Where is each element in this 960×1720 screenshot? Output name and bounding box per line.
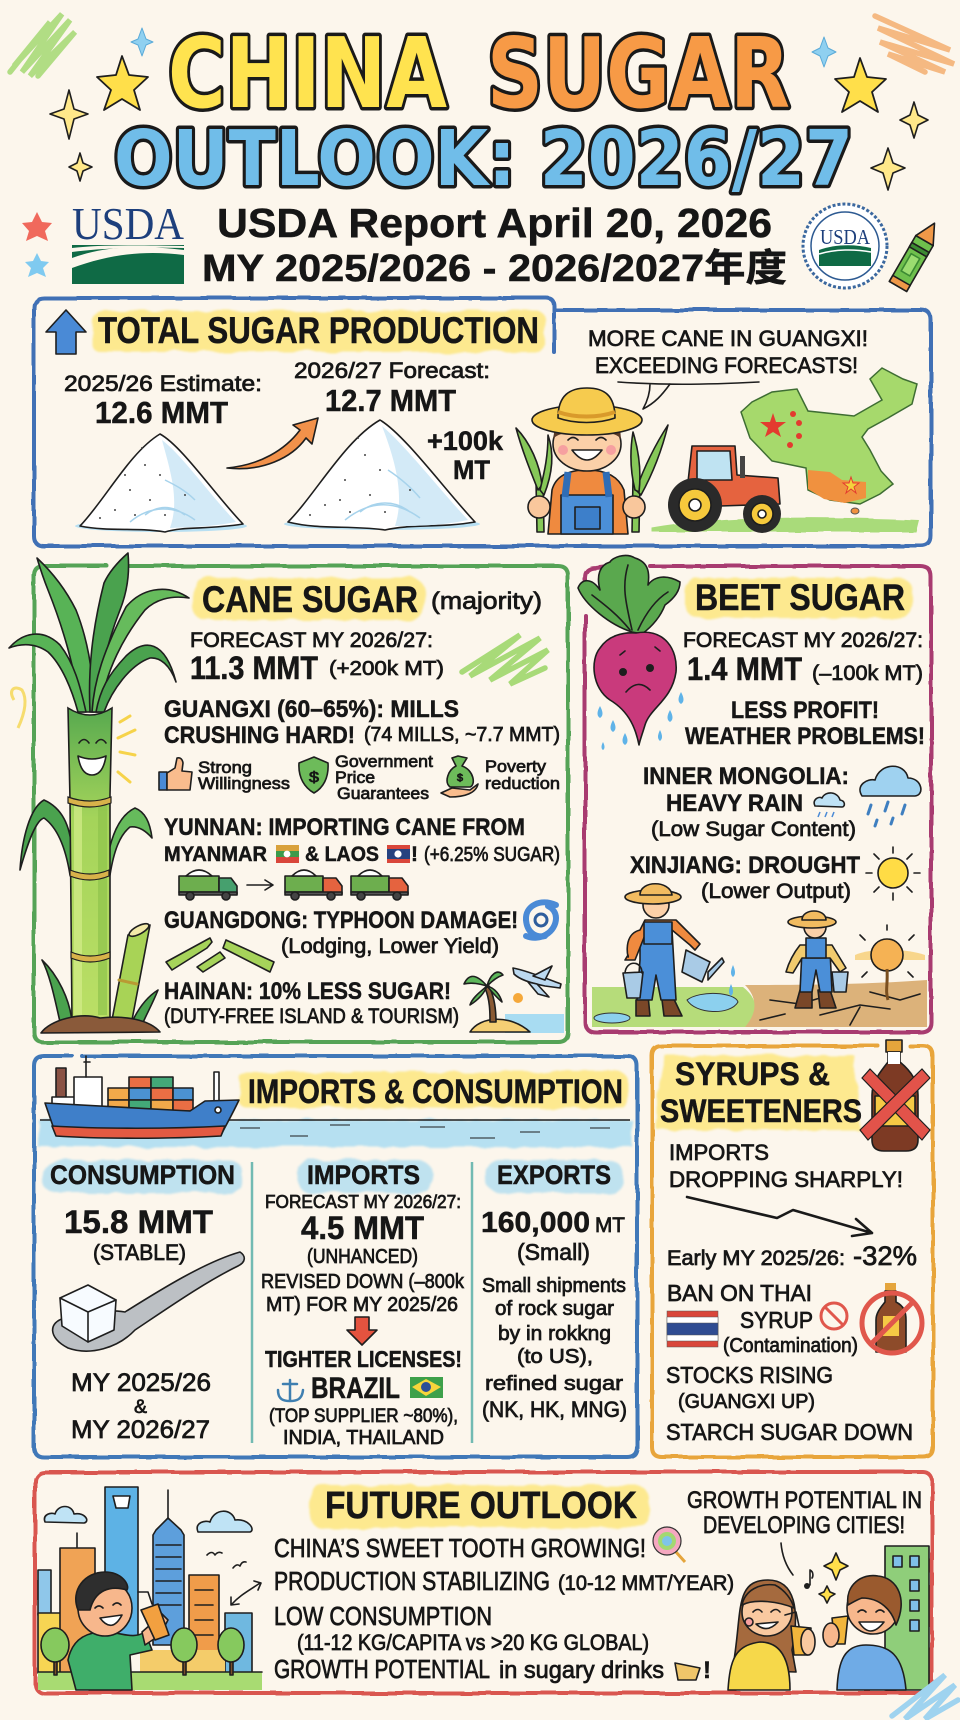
illustration: beet with sad face xyxy=(578,555,680,745)
suppliers xyxy=(269,1406,458,1449)
text: outlook points xyxy=(274,1533,734,1684)
logo: USDA xyxy=(72,199,184,284)
icon: big rain cloud xyxy=(860,766,921,826)
icon: USDA seal: USDA xyxy=(820,225,871,249)
panel: total sugar production xyxy=(34,298,931,546)
report subtitle: MY 2025/2026 - 2026/2027年度 xyxy=(202,248,787,290)
illustration: green building xyxy=(885,1546,929,1690)
cane leaves xyxy=(9,553,189,1025)
heading highlight xyxy=(657,1056,860,1130)
icon: sun xyxy=(866,847,920,900)
estimate figures: 12.6 MMT xyxy=(95,395,228,430)
forecast figures: 12.7 MMT xyxy=(325,383,456,418)
text: Yunnan: & LAOS xyxy=(305,843,379,866)
heading: CONSUMPTION xyxy=(50,1160,235,1190)
description: refined sugar xyxy=(485,1373,623,1395)
text: Xinjiang: (Lower Output) xyxy=(701,880,851,903)
illustration: city skyline xyxy=(38,1487,252,1673)
heading highlight xyxy=(239,1072,627,1108)
panel: imports and consumption xyxy=(34,1056,637,1457)
logo: USDA: USDA xyxy=(72,199,184,249)
arrow: truck transfer xyxy=(247,880,273,890)
heading highlight xyxy=(486,1160,623,1193)
estimate figures xyxy=(64,371,262,430)
illustration: farmer in drought xyxy=(786,911,848,1008)
years: & xyxy=(134,1397,147,1418)
value: (Small) xyxy=(517,1239,590,1265)
suppliers: (TOP SUPPLIER ~80%), xyxy=(269,1406,458,1427)
icon: prohibit sign xyxy=(821,1303,847,1329)
forecast: (–100k MT) xyxy=(812,662,923,685)
icon: water droplets xyxy=(729,965,735,996)
label: strong willingness: Willingness xyxy=(198,774,290,793)
heading: FUTURE OUTLOOK xyxy=(325,1485,637,1527)
figure: minus 32 percent: Early MY 2025/26: xyxy=(667,1247,845,1270)
estimate figures: 2025/26 Estimate: xyxy=(64,371,262,396)
panel: beet sugar xyxy=(578,555,931,1032)
text: Xinjiang: XINJIANG: DROUGHT xyxy=(630,852,860,879)
icon: shield xyxy=(299,757,328,793)
title: CHINA xyxy=(168,17,447,130)
value: 15.8 MMT xyxy=(64,1204,213,1240)
heading: BEET SUGAR xyxy=(695,577,905,618)
label: government price guarantees: Price xyxy=(335,768,375,787)
heading highlight xyxy=(192,578,425,620)
map: China with cane regions xyxy=(741,368,917,514)
heading: (majority) xyxy=(431,588,542,615)
text: less profit xyxy=(685,697,925,750)
icon: broken cane xyxy=(166,938,274,972)
tighter licenses: TIGHTER LICENSES! xyxy=(265,1346,462,1372)
text: outlook points: (11-12 KG/CAPITA vs >20 KG GLOBAL) xyxy=(297,1630,649,1655)
years: MY 2026/27 xyxy=(71,1416,210,1444)
forecast: FORECAST MY 2026/27: xyxy=(265,1192,461,1212)
scribble: top right orange xyxy=(875,16,954,72)
text: outlook points: GROWTH POTENTIAL xyxy=(274,1654,490,1684)
forecast figures xyxy=(294,358,490,418)
speech bubble: more cane: MORE CANE IN GUANGXI! xyxy=(588,326,868,351)
description: Small shipments xyxy=(482,1275,626,1297)
title xyxy=(114,17,853,204)
arrow: double ended xyxy=(231,1581,261,1605)
change label: MT xyxy=(453,455,490,485)
text: stocks and starch: STOCKS RISING xyxy=(666,1362,833,1388)
text: outlook points: PRODUCTION STABILIZING xyxy=(274,1566,550,1596)
icon: crossed out syrup bottle xyxy=(860,1040,930,1151)
suppliers: INDIA, THAILAND xyxy=(283,1427,444,1449)
illustration: boy with drink xyxy=(68,1572,169,1690)
forecast: (+200k MT) xyxy=(329,658,444,680)
sugar pile 2025/26 xyxy=(75,434,247,532)
report subtitle: USDA Report April 20, 2026 xyxy=(217,200,772,246)
icon: thumbs up xyxy=(159,758,192,790)
illustration: farmer with cane xyxy=(516,388,668,534)
icon: small rain cloud xyxy=(814,793,844,817)
heading highlight xyxy=(685,578,913,618)
forecast: FORECAST MY 2026/27: xyxy=(683,629,923,652)
value xyxy=(64,1204,213,1265)
icon: red and blue crayon stars xyxy=(22,212,52,277)
text: Inner Mongolia: HEAVY RAIN xyxy=(666,790,803,817)
change label: +100k xyxy=(427,426,504,456)
text: Yunnan: YUNNAN: IMPORTING CANE FROM xyxy=(164,814,525,841)
arrow: orange rising xyxy=(227,418,318,469)
illustration: wet and cracked ground xyxy=(592,980,927,1027)
value: (STABLE) xyxy=(93,1240,186,1265)
change label xyxy=(427,426,504,485)
illustration: sparkles and music note xyxy=(804,1553,848,1603)
text: Hainan xyxy=(164,978,459,1028)
forecast figures: 2026/27 Forecast: xyxy=(294,358,490,383)
Brazil label: BRAZIL xyxy=(311,1372,400,1405)
illustration: container ship xyxy=(45,1056,239,1138)
speech bubble: more cane: EXCEEDING FORECASTS! xyxy=(595,353,858,378)
text: ban on Thai syrup: SYRUP xyxy=(740,1307,813,1333)
small cut cane xyxy=(112,921,151,1020)
forecast xyxy=(261,1192,465,1316)
illustration: drying sun and wilted plant xyxy=(855,925,925,1000)
value: MT xyxy=(595,1214,625,1237)
description xyxy=(482,1275,627,1422)
icon: USDA seal xyxy=(803,204,887,288)
text: Yunnan: ! xyxy=(411,843,418,866)
illustration: ground and trees xyxy=(38,1628,262,1690)
label: poverty reduction: reduction xyxy=(485,774,560,793)
text: imports dropping: DROPPING SHARPLY! xyxy=(669,1167,903,1192)
heading: EXPORTS xyxy=(497,1160,611,1190)
cane stalk xyxy=(68,708,112,1022)
label: government price guarantees xyxy=(335,752,433,803)
illustration: birds xyxy=(207,1552,246,1568)
label: poverty reduction xyxy=(485,757,560,793)
text: outlook points: LOW CONSUMPTION xyxy=(274,1601,492,1631)
description: of rock sugar xyxy=(495,1298,614,1320)
text: Inner Mongolia xyxy=(643,763,856,841)
text: outlook points: ! xyxy=(703,1657,711,1684)
text: imports dropping: IMPORTS xyxy=(669,1140,769,1165)
water band xyxy=(38,1120,633,1147)
sugar pile 2026/27 xyxy=(284,420,480,530)
icon: shield: $ xyxy=(309,769,320,786)
text: imports dropping xyxy=(669,1140,903,1192)
arrow: red down xyxy=(347,1317,377,1345)
text: lodging: (Lodging, Lower Yield) xyxy=(281,935,499,958)
scribble: top left green xyxy=(10,14,75,76)
icon: money bag in hand: $ xyxy=(457,773,463,784)
text: Guangxi: CRUSHING HARD! xyxy=(164,722,355,749)
title: OUTLOOK: 2026/27 xyxy=(114,115,853,204)
heading: SWEETENERS xyxy=(660,1093,862,1129)
icon: lollipop xyxy=(653,1527,685,1562)
icon: drink pouch xyxy=(675,1663,700,1680)
label: government price guarantees: Guarantees xyxy=(337,784,429,803)
heading xyxy=(660,1056,862,1129)
text: Guangxi xyxy=(164,696,560,749)
label: government price guarantees: Government xyxy=(335,752,433,771)
text: Yunnan xyxy=(164,814,560,866)
column: exports xyxy=(481,1160,627,1422)
forecast: 1.4 MMT xyxy=(687,651,802,687)
text: Hainan: HAINAN: 10% LESS SUGAR! xyxy=(164,978,451,1005)
speech bubble: more cane xyxy=(588,326,868,409)
illustration: girl with drink xyxy=(728,1580,815,1690)
forecast: MT) FOR MY 2025/26 xyxy=(266,1294,458,1316)
column: imports xyxy=(261,1160,465,1449)
text: Inner Mongolia: INNER MONGOLIA: xyxy=(643,763,849,790)
illustration: clouds xyxy=(44,1506,252,1532)
callout: growth potential xyxy=(687,1487,922,1575)
text: Inner Mongolia: (Low Sugar Content) xyxy=(651,818,856,841)
title: SUGAR xyxy=(487,17,790,130)
figure: minus 32 percent xyxy=(667,1241,917,1271)
cane face xyxy=(78,740,106,775)
icon: anchor xyxy=(278,1380,303,1401)
divider lines xyxy=(252,1162,472,1443)
icon: flag of Thailand xyxy=(667,1311,718,1347)
icon: plane xyxy=(513,966,561,997)
text: stocks and starch xyxy=(666,1362,913,1445)
label: strong willingness: Strong xyxy=(198,758,252,777)
icon: falling sweat drops xyxy=(598,692,684,750)
icon: spoon with sugar cube xyxy=(53,1252,244,1351)
scribble: bottom right blue xyxy=(892,1675,958,1719)
label: strong willingness xyxy=(198,758,290,793)
scribble: yellow left of cane xyxy=(12,688,25,728)
text: less profit: WEATHER PROBLEMS! xyxy=(685,723,925,750)
text: Yunnan: (+6.25% SUGAR) xyxy=(424,844,560,866)
text: ban on Thai syrup xyxy=(667,1280,858,1357)
text: stocks and starch: (GUANGXI UP) xyxy=(678,1391,815,1413)
decorative stars and sparkles xyxy=(50,28,928,190)
heading highlight xyxy=(297,1160,432,1193)
heading: IMPORTS xyxy=(307,1160,420,1190)
soil mound xyxy=(41,1016,160,1033)
icon: flag of Myanmar xyxy=(276,845,299,863)
text: ban on Thai syrup: (Contamination) xyxy=(723,1335,858,1357)
text: outlook points: (10-12 MMT/YEAR) xyxy=(558,1572,734,1595)
illustration: tractor xyxy=(668,446,781,533)
heading: TOTAL SUGAR PRODUCTION xyxy=(98,310,539,351)
heading: IMPORTS & CONSUMPTION xyxy=(248,1073,623,1111)
value: 160,000 xyxy=(481,1207,590,1239)
arrow: downward trend xyxy=(687,1197,872,1236)
icon: money bag in hand xyxy=(441,756,478,797)
text: less profit: LESS PROFIT! xyxy=(731,697,879,724)
text: ban on Thai syrup: BAN ON THAI xyxy=(667,1280,812,1306)
icon: flag of Laos xyxy=(387,845,410,863)
icon: cyclone xyxy=(526,902,556,938)
text: Hainan: (DUTY-FREE ISLAND & TOURISM) xyxy=(164,1005,459,1028)
panel: future outlook xyxy=(35,1472,932,1693)
label: poverty reduction: Poverty xyxy=(485,757,547,776)
text: outlook points: in sugary drinks xyxy=(499,1657,664,1684)
forecast: FORECAST MY 2026/27: xyxy=(190,629,433,652)
forecast: 4.5 MMT xyxy=(301,1210,424,1246)
forecast xyxy=(190,629,444,686)
forecast: (UNHANCED) xyxy=(307,1246,418,1268)
icon: flag of Brazil xyxy=(410,1377,443,1398)
panel: syrups and sweeteners xyxy=(652,1040,933,1457)
callout: growth potential: DEVELOPING CITIES! xyxy=(703,1512,905,1539)
icon: truck red xyxy=(285,870,342,900)
illustration: farmer with watering can xyxy=(623,884,724,1016)
heading highlight xyxy=(309,1485,649,1528)
icon: green crayon xyxy=(889,218,943,291)
panel: cane sugar xyxy=(34,566,568,1042)
heading highlight xyxy=(92,311,545,352)
description: (to US), xyxy=(517,1346,593,1368)
text: Guangxi: GUANGXI (60–65%): MILLS xyxy=(164,696,459,723)
scribble: green xyxy=(462,635,548,684)
text: Xinjiang xyxy=(630,852,860,903)
years xyxy=(71,1369,211,1444)
illustration: boy in blue xyxy=(823,1576,906,1690)
heading: CANE SUGAR xyxy=(202,579,418,620)
icon: truck green xyxy=(179,870,237,900)
text: outlook points: CHINA’S SWEET TOOTH GROWING! xyxy=(274,1533,646,1563)
forecast: REVISED DOWN (–800k xyxy=(261,1271,465,1293)
description: by in rokkng xyxy=(498,1323,611,1345)
icon: truck red second xyxy=(351,870,408,900)
icon: up arrow xyxy=(46,310,86,354)
illustration: smiling sugarcane xyxy=(9,553,189,1033)
text: Yunnan: MYANMAR xyxy=(164,843,267,866)
text: Guangdong: GUANGDONG: TYPHOON DAMAGE! xyxy=(164,907,518,934)
years: MY 2025/26 xyxy=(71,1369,211,1397)
forecast: 11.3 MMT xyxy=(190,650,318,686)
column: consumption xyxy=(42,1160,244,1444)
figure: minus 32 percent: -32% xyxy=(853,1241,917,1271)
report subtitle xyxy=(202,200,787,290)
text: stocks and starch: STARCH SUGAR DOWN xyxy=(666,1419,913,1445)
forecast xyxy=(683,629,923,687)
callout: growth potential: GROWTH POTENTIAL IN xyxy=(687,1487,922,1514)
description: (NK, HK, MNG) xyxy=(482,1397,627,1422)
value xyxy=(481,1207,625,1265)
yellow rays xyxy=(118,716,135,782)
heading: SYRUPS & xyxy=(675,1056,830,1092)
heading highlight xyxy=(42,1160,243,1193)
illustration: beach with palm xyxy=(464,972,564,1033)
icon: banned bottle xyxy=(862,1283,922,1353)
text: Guangxi: (74 MILLS, ~7.7 MMT) xyxy=(364,724,560,746)
illustration: grass xyxy=(652,518,919,532)
